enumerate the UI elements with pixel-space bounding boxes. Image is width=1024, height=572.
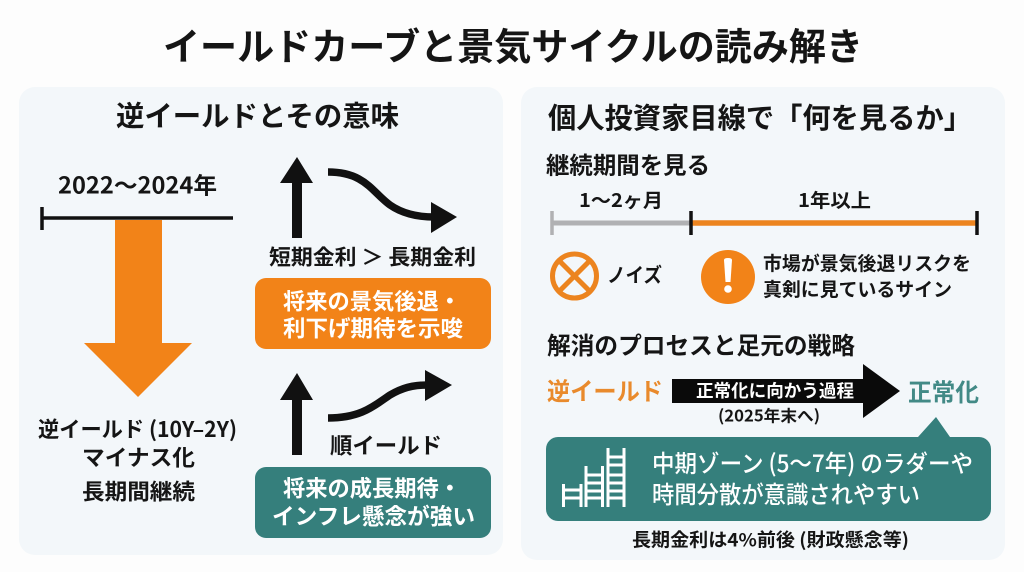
duration labels bbox=[579, 186, 871, 213]
inverted yield description: マイナス化 bbox=[82, 440, 195, 472]
inverted yield label: 逆イールド bbox=[547, 373, 663, 408]
risk signal text: 真剣に見ているサイン bbox=[763, 275, 952, 302]
icon: ladders bbox=[564, 448, 624, 507]
inverted rate comparison label: 短期金利 ＞ 長期金利 bbox=[269, 242, 476, 272]
callout: ladder strategy bbox=[546, 417, 991, 521]
right panel heading: 個人投資家目線で「何を見るか」 bbox=[548, 96, 972, 137]
ladder strategy text bbox=[652, 444, 973, 510]
risk signal text bbox=[763, 249, 971, 302]
icon: short rate up arrow bbox=[280, 157, 313, 238]
ladder strategy text: 時間分散が意識されやすい bbox=[652, 475, 920, 510]
normalized label: 正常化 bbox=[908, 374, 979, 409]
ladder strategy text: 中期ゾーン (5〜7年) のラダーや bbox=[652, 444, 973, 479]
left panel heading: 逆イールドとその意味 bbox=[116, 94, 399, 135]
title: イールドカーブと景気サイクルの読み解き bbox=[163, 16, 863, 71]
duration labels: 1〜2ヶ月 bbox=[579, 186, 663, 213]
callout: recession expectation: 将来の景気後退・ bbox=[283, 284, 461, 316]
callout: growth expectation bbox=[255, 467, 491, 538]
inverted yield description: 長期間継続 bbox=[82, 474, 195, 506]
inverted yield description bbox=[38, 413, 237, 506]
long-term rate note: 長期金利は4%前後 (財政懸念等) bbox=[632, 526, 909, 552]
icon: exclamation circle bbox=[701, 250, 755, 304]
icon: noise cross circle bbox=[552, 254, 596, 298]
normalization date label: (2025年末へ) bbox=[718, 402, 820, 426]
normal yield label: 順イールド bbox=[330, 428, 442, 460]
callout: recession expectation bbox=[255, 278, 491, 349]
panel: what individual investors should watch bbox=[521, 87, 1005, 560]
resolution subheading: 解消のプロセスと足元の戦略 bbox=[547, 326, 855, 361]
icon: normal yield up arrow bbox=[280, 373, 313, 455]
panel: inverted yield and its meaning bbox=[19, 87, 503, 555]
duration timeline bbox=[552, 211, 977, 235]
icon: normal curve arrow bbox=[328, 370, 452, 418]
callout: growth expectation: 将来の成長期待・ bbox=[283, 472, 461, 504]
noise label: ノイズ bbox=[607, 259, 662, 288]
period label: 2022〜2024年 bbox=[58, 166, 217, 200]
risk signal text: 市場が景気後退リスクを bbox=[763, 249, 971, 276]
callout: growth expectation: インフレ懸念が強い bbox=[272, 500, 475, 532]
icon: large orange down arrow bbox=[84, 220, 192, 397]
normalization process label: 正常化に向かう過程 bbox=[696, 378, 854, 403]
duration labels: 1年以上 bbox=[798, 186, 871, 213]
inverted yield description: 逆イールド (10Y–2Y) bbox=[38, 413, 237, 444]
callout: recession expectation: 利下げ期待を示唆 bbox=[283, 312, 463, 344]
period timeline bbox=[42, 207, 233, 230]
icon: inverted curve arrow bbox=[328, 172, 457, 233]
icon: normalization arrow bbox=[672, 364, 900, 418]
duration subheading: 継続期間を見る bbox=[546, 146, 710, 180]
